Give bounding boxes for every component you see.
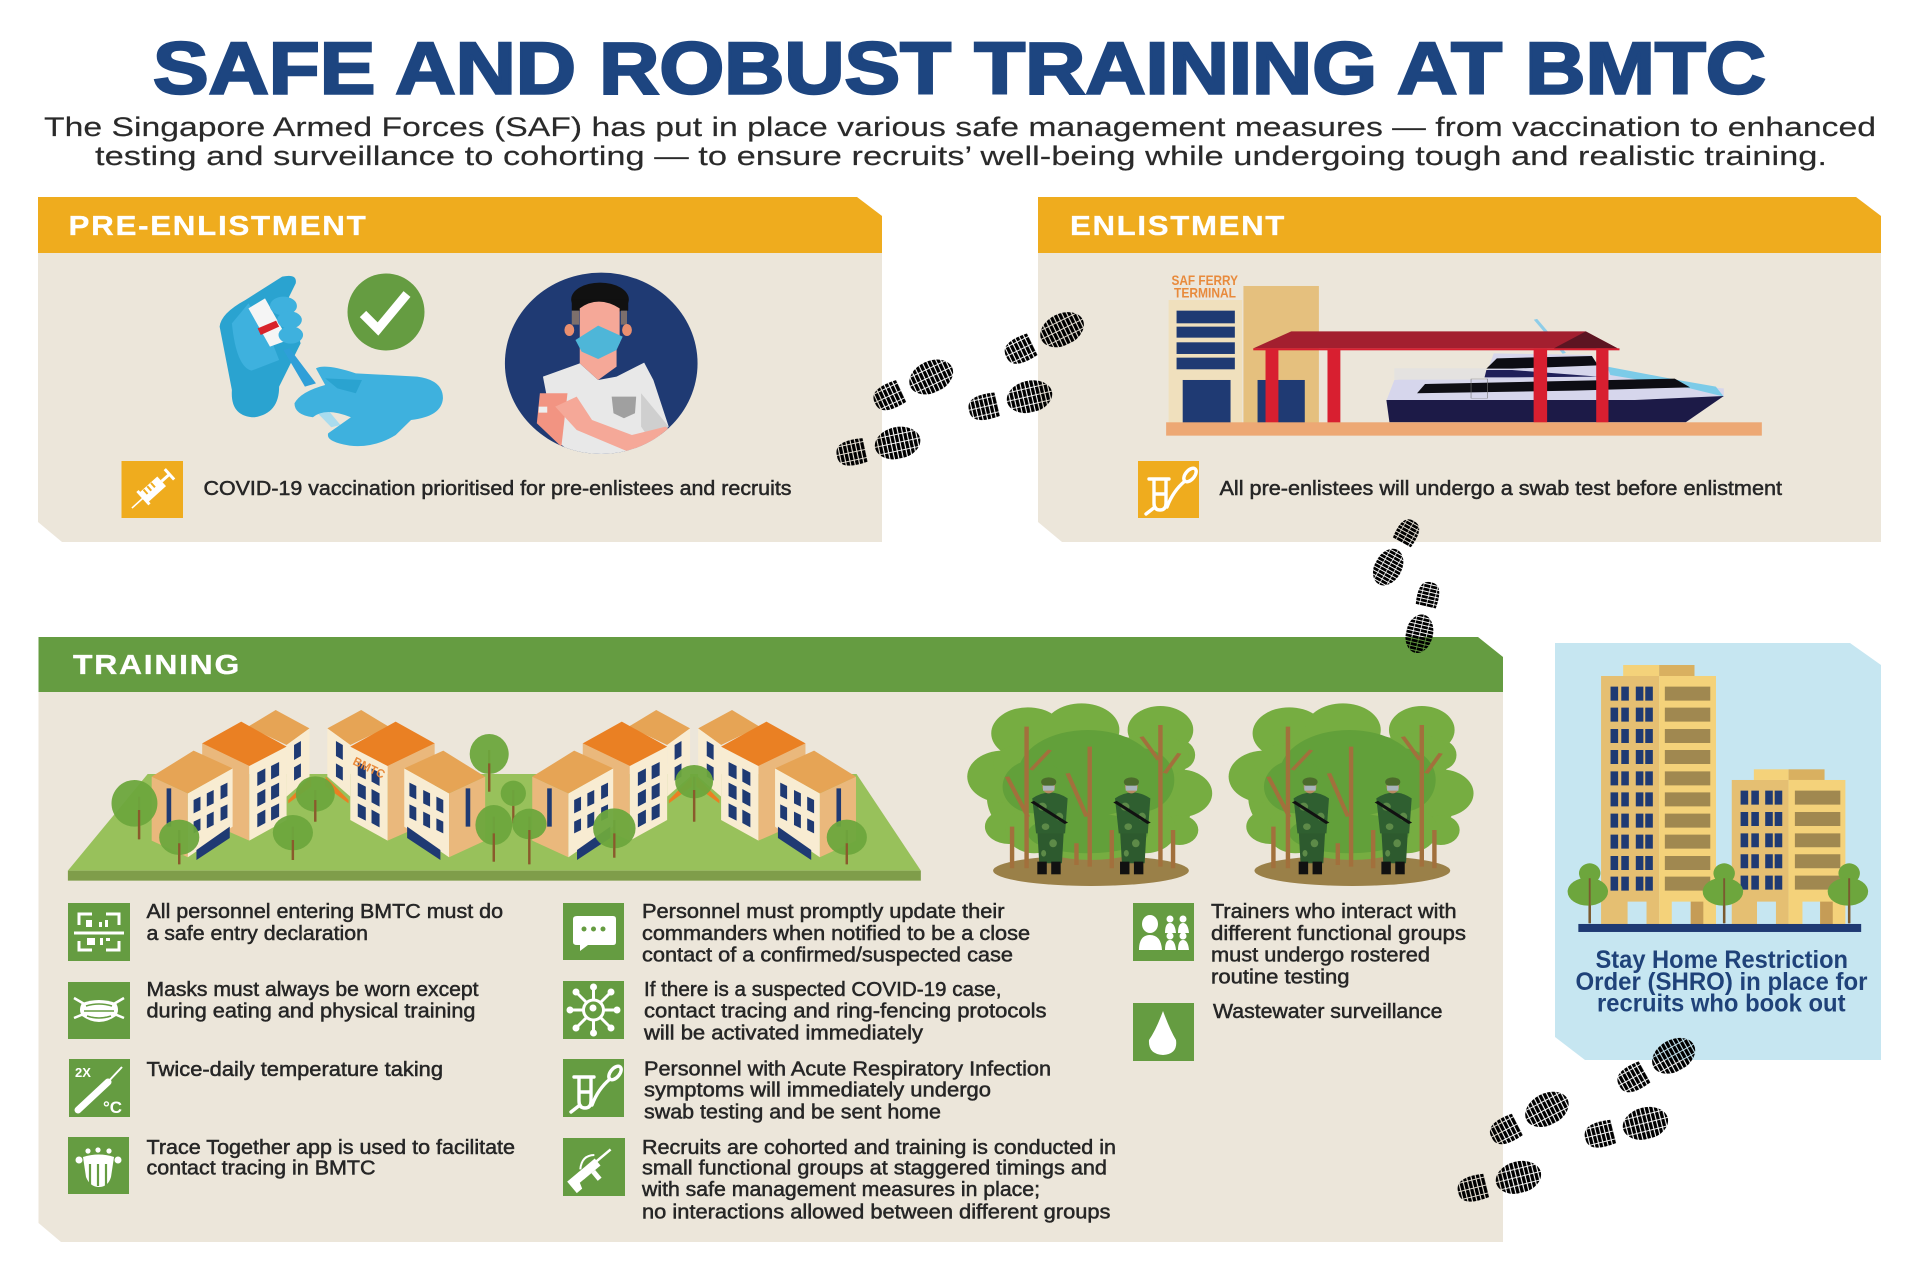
heading: training: TRAINING xyxy=(73,649,241,680)
icon: water drop xyxy=(1133,1003,1194,1061)
icon: thermometer: 2X xyxy=(75,1065,91,1080)
text: safe entry xyxy=(146,901,503,945)
text: SHRO xyxy=(1576,946,1868,1018)
intro text: testing and surveillance to cohorting — to ensure recruits’ well-being while undergoing tough and realistic training. xyxy=(95,141,1827,171)
text: suspected case: will be activated immediately xyxy=(643,1022,923,1044)
text: respiratory infection xyxy=(644,1058,1051,1124)
footprints: enlistment to training xyxy=(1367,514,1444,656)
text: trainers xyxy=(1211,901,1466,988)
illustration: BMTC campus xyxy=(68,710,921,881)
text: promptly update: commanders when notified to be a close xyxy=(642,923,1030,945)
text: wastewater: Wastewater surveillance xyxy=(1213,1001,1442,1023)
illustration: SAF ferry terminal and ferry: SAF FERRY xyxy=(1172,272,1239,288)
text: masks: during eating and physical training xyxy=(146,1000,476,1022)
text: suspected case xyxy=(643,979,1046,1044)
caption: vaccination: COVID-19 vaccination prioritised for pre-enlistees and recruits xyxy=(204,478,792,500)
intro text: The Singapore Armed Forces (SAF) has put in place various safe management measures — from vaccination to enhanced xyxy=(44,112,1876,142)
text: cohorts xyxy=(641,1137,1116,1224)
heading: enlistment: ENLISTMENT xyxy=(1070,210,1286,241)
text: promptly update xyxy=(642,901,1030,966)
text: trainers: different functional groups xyxy=(1211,923,1466,945)
icon: syringe xyxy=(122,461,183,518)
illustration: SAF ferry terminal and ferry: TERMINAL xyxy=(1174,284,1236,300)
icon: thermometer: °C xyxy=(103,1098,122,1117)
text: safe entry: a safe entry declaration xyxy=(146,923,368,945)
illustration: soldiers in forest xyxy=(967,703,1474,886)
panel: stay home restriction order xyxy=(1555,643,1881,1060)
text: respiratory infection: swab testing and be sent home xyxy=(644,1102,941,1124)
text: safe entry: All personnel entering BMTC must do xyxy=(146,901,503,923)
panel: pre-enlistment xyxy=(38,197,882,542)
text: SHRO: Order (SHRO) in place for xyxy=(1576,968,1868,996)
icon: swab test xyxy=(1138,461,1199,518)
footprints: training to stay home xyxy=(1454,1031,1701,1208)
text: respiratory infection: symptoms will immediately undergo xyxy=(644,1080,991,1102)
icon: mask xyxy=(68,982,130,1039)
caption: swab test: All pre-enlistees will undergo a swab test before enlistment xyxy=(1220,478,1782,500)
text: trace together: contact tracing in BMTC xyxy=(146,1158,376,1180)
icon: virus xyxy=(563,981,624,1039)
text: suspected case: contact tracing and ring-fencing protocols xyxy=(644,1000,1046,1022)
text: promptly update: contact of a confirmed/suspected case xyxy=(642,944,1013,966)
title: SAFE AND ROBUST TRAINING AT BMTC xyxy=(153,28,1766,110)
panel: enlistment xyxy=(1038,197,1881,542)
text: masks: Masks must always be worn except xyxy=(146,979,479,1001)
icon: QR safe entry xyxy=(68,903,130,961)
text: trainers: Trainers who interact with xyxy=(1211,901,1456,923)
text: temperature: Twice-daily temperature taking xyxy=(146,1059,443,1081)
illustration: apartment blocks xyxy=(1568,665,1868,932)
illustration: SAF ferry terminal and ferry xyxy=(1166,272,1762,436)
text: cohorts: Recruits are cohorted and training is conducted in xyxy=(642,1137,1116,1159)
icon: swab testing xyxy=(563,1059,624,1117)
icon: rifle xyxy=(563,1138,625,1196)
footprints: pre-enlistment to enlistment xyxy=(834,305,1090,472)
intro text xyxy=(44,112,1876,171)
heading: pre-enlistment: PRE-ENLISTMENT xyxy=(68,210,368,241)
icon: speech bubble xyxy=(563,903,624,960)
text: trainers: must undergo rostered xyxy=(1211,944,1430,966)
text: promptly update: Personnel must promptly update their xyxy=(642,901,1005,923)
text: SHRO: Stay Home Restriction xyxy=(1596,946,1848,974)
icon: people groups xyxy=(1133,903,1194,961)
text: cohorts: with safe management measures in place; xyxy=(641,1179,1040,1201)
illustration: vaccinated recruit xyxy=(505,273,698,457)
text: respiratory infection: Personnel with Acute Respiratory Infection xyxy=(644,1058,1051,1080)
text: cohorts: no interactions allowed between different groups xyxy=(642,1202,1110,1224)
panel: training xyxy=(38,637,1503,1242)
icon: trace together xyxy=(68,1137,129,1194)
text: cohorts: small functional groups at staggered timings and xyxy=(642,1158,1107,1180)
text: masks xyxy=(146,979,479,1022)
icon: check mark xyxy=(348,274,424,350)
text: trace together: Trace Together app is used to facilitate xyxy=(146,1137,515,1159)
text: suspected case: If there is a suspected COVID-19 case, xyxy=(644,979,1002,1001)
text: trace together xyxy=(146,1137,515,1180)
illustration: gloved hands with vaccine xyxy=(220,276,443,446)
icon: thermometer xyxy=(69,1059,130,1117)
text: SHRO: recruits who book out xyxy=(1597,990,1846,1018)
text: trainers: routine testing xyxy=(1211,966,1350,988)
illustration: BMTC campus: BMTC xyxy=(351,754,388,782)
